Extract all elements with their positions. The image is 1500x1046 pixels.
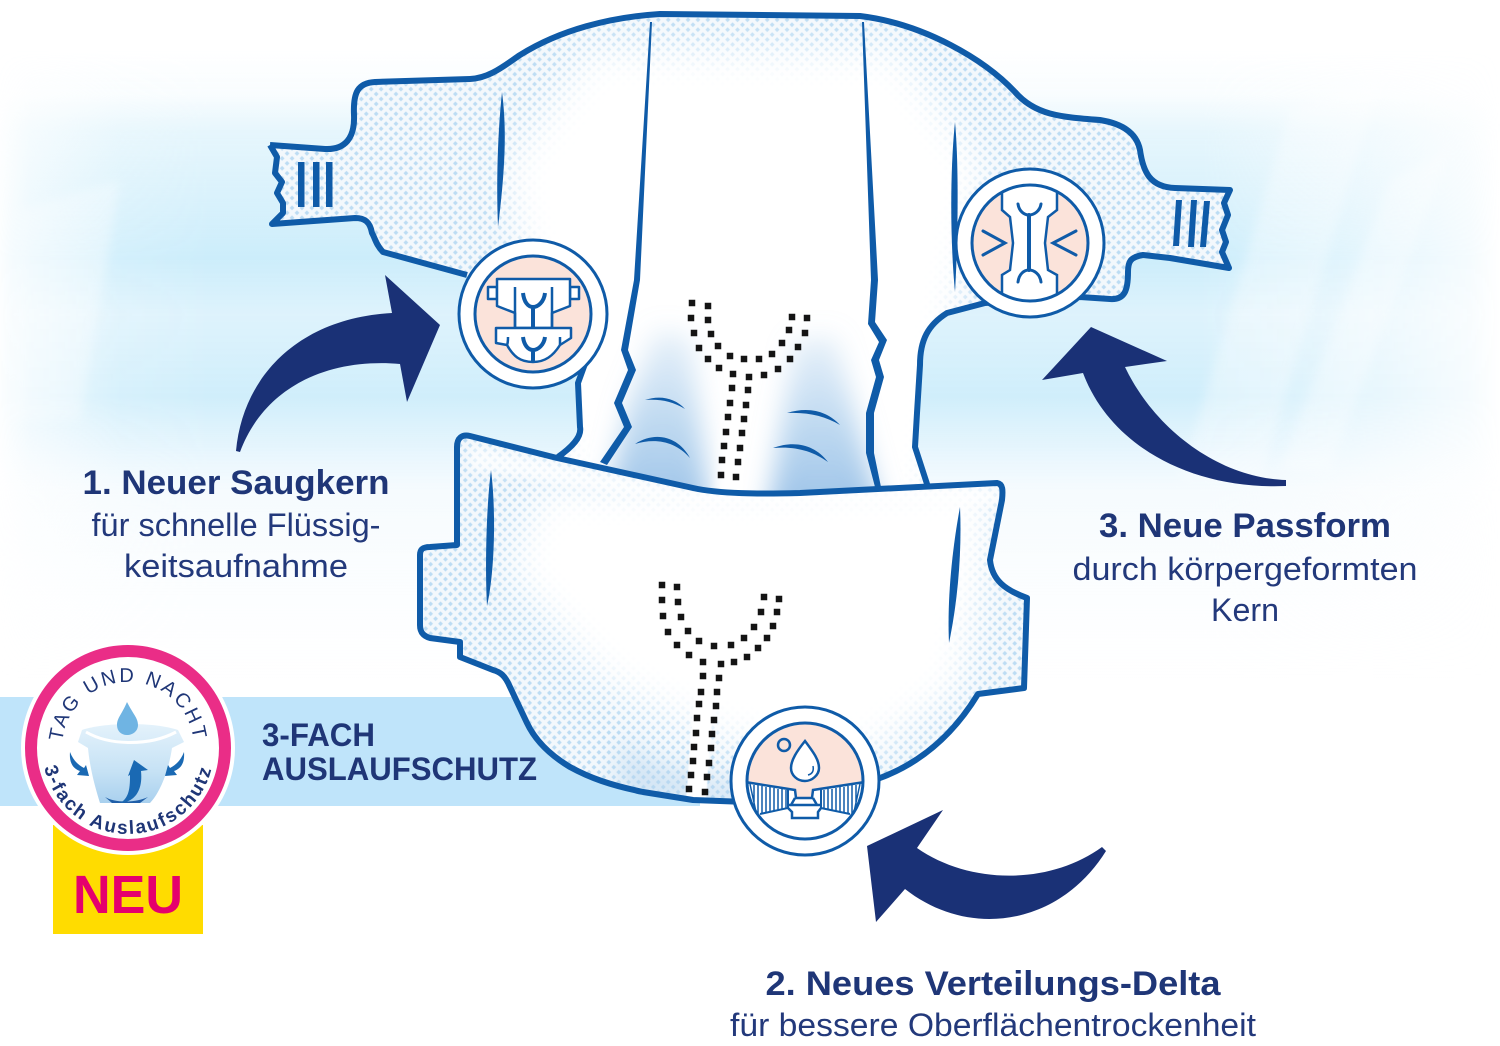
label 2: für bessere Oberflächentrockenheit xyxy=(730,1007,1256,1043)
label 2 xyxy=(730,965,1256,1043)
label 3: Kern xyxy=(1211,592,1279,628)
background haze xyxy=(8,98,1476,514)
core shadows xyxy=(598,327,890,490)
panel fold lines xyxy=(497,22,958,487)
band label: 3-FACH xyxy=(262,717,375,753)
label 1: 1. Neuer Saugkern xyxy=(82,464,390,502)
arrow 3 xyxy=(1042,327,1286,486)
band label: AUSLAUFSCHUTZ xyxy=(262,751,537,787)
label 3: 3. Neue Passform xyxy=(1099,507,1391,545)
diaper: lower front panel xyxy=(410,430,1040,810)
badge: Tag und Nacht roundel xyxy=(21,645,235,855)
core crease lines xyxy=(635,398,840,462)
icon circle 2: Verteilungs-Delta xyxy=(731,707,879,855)
badge: Tag und Nacht roundel: TAG UND NACHT xyxy=(48,668,207,739)
elastic stripes: left xyxy=(298,162,332,207)
badge: NEU tag: NEU xyxy=(73,865,183,925)
label 1 xyxy=(82,464,390,584)
label 3: durch körpergeformten xyxy=(1072,551,1418,587)
badge: NEU tag xyxy=(53,825,203,934)
label 1: keitsaufnahme xyxy=(124,548,348,584)
label 3 xyxy=(1072,507,1418,628)
badge: Tag und Nacht roundel: 3-fach Auslaufschutz xyxy=(45,765,212,834)
icon circle 3: Passform xyxy=(956,169,1104,317)
icon circle 1: Saugkern xyxy=(459,240,607,388)
roundel pants illustration xyxy=(70,702,184,803)
dotted channel: lower xyxy=(662,585,779,792)
elastic stripes: right xyxy=(1173,200,1210,247)
arrow 2 xyxy=(867,810,1106,922)
dotted channel: upper xyxy=(691,303,807,477)
band: 3-fach Auslaufschutz xyxy=(0,697,700,806)
arrow 1 xyxy=(236,275,440,452)
fold marks xyxy=(486,470,961,643)
band label xyxy=(262,717,537,787)
diaper: upper back panel xyxy=(268,11,1233,490)
label 2: 2. Neues Verteilungs-Delta xyxy=(766,965,1222,1003)
label 1: für schnelle Flüssig- xyxy=(92,507,380,543)
